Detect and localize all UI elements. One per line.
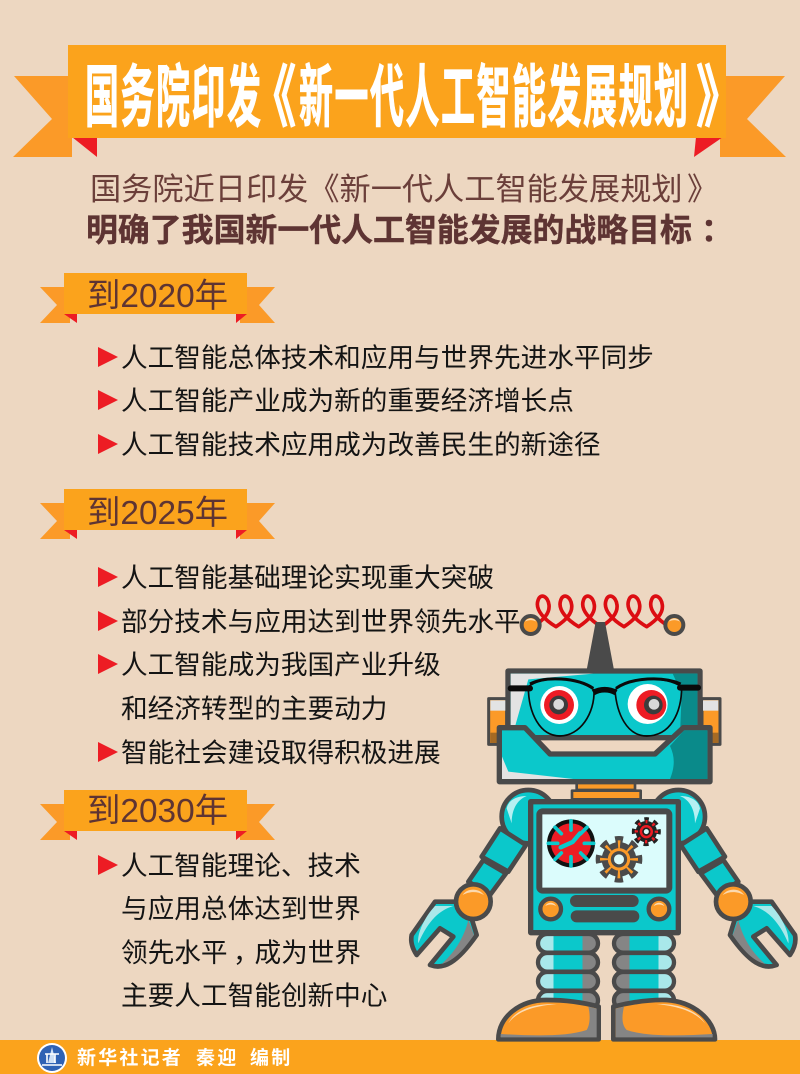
goals 2020: 人工智能产业成为新的重要经济增长点 [121, 386, 574, 416]
goals 2030: 与应用总体达到世界 [121, 894, 361, 924]
robot screen [539, 811, 669, 891]
intro text: 》 [687, 172, 718, 207]
goals 2025: 部分技术与应用达到世界领先水平 [121, 607, 521, 637]
robot legs [538, 934, 674, 1010]
robot feet [498, 1000, 715, 1039]
goals 2020: 人工智能技术应用成为改善民生的新途径 [121, 430, 601, 460]
icon: Xinhua logo [37, 1043, 67, 1073]
intro text: 明确了我国新一代人工智能发展的战略目标 [86, 212, 692, 248]
title: 》 [696, 60, 744, 136]
goals 2030: 主要人工智能创新中心 [121, 981, 387, 1011]
robot head shell [508, 671, 700, 738]
title: 国务院印发 [85, 60, 262, 136]
section banner: 2020 [40, 273, 275, 323]
footer credit: 新华社记者 [77, 1046, 183, 1069]
intro text: ： [701, 212, 733, 248]
goals 2030: 成为世界 [254, 938, 361, 968]
section banner: 2030 [40, 790, 275, 840]
robot ears [489, 699, 720, 744]
goals 2025: 人工智能基础理论实现重大突破 [121, 563, 494, 593]
robot arms [411, 790, 795, 967]
antenna coil [533, 596, 669, 627]
goals 2025: 智能社会建设取得积极进展 [121, 738, 441, 768]
icon: clock dial [547, 819, 595, 867]
goals 2030: 领先水平 [121, 938, 228, 968]
goals 2030 [98, 851, 387, 1011]
robot illustration [411, 596, 795, 1039]
goals 2030: ， [233, 938, 260, 968]
goals 2020: 人工智能总体技术和应用与世界先进水平同步 [121, 343, 654, 373]
title [85, 60, 744, 136]
goals 2020 [98, 343, 654, 460]
glasses [511, 679, 698, 736]
robot control panel [540, 895, 669, 922]
antenna [522, 616, 683, 670]
title: 新一代人工智能发展规划 [299, 60, 689, 136]
section banner: 2030: 到2030年 [87, 793, 228, 830]
eyes [540, 684, 668, 724]
robot neck [572, 783, 641, 799]
footer credit: 秦迎 [196, 1047, 238, 1069]
footer bar [0, 1040, 800, 1074]
robot jaw [499, 728, 710, 782]
robot body [411, 783, 795, 1039]
title: 《 [250, 60, 298, 136]
footer credit: 编制 [250, 1046, 292, 1069]
icon: red gear [634, 819, 659, 844]
robot torso [531, 802, 678, 933]
intro text [86, 172, 733, 248]
section banner: 2025 [40, 489, 275, 539]
goals 2025 [98, 563, 521, 768]
robot head [489, 596, 720, 782]
section banner: 2020: 到2020年 [87, 278, 228, 315]
goals 2025: 人工智能成为我国产业升级 [121, 650, 441, 680]
section banner: 2025: 到2025年 [87, 495, 228, 532]
icon: orange gear [599, 839, 639, 879]
goals 2030: 人工智能理论、技术 [121, 851, 361, 881]
intro text: 国务院近日印发《新一代人工智能发展规划 [90, 172, 683, 207]
title banner [13, 45, 786, 157]
goals 2025: 和经济转型的主要动力 [121, 694, 387, 724]
